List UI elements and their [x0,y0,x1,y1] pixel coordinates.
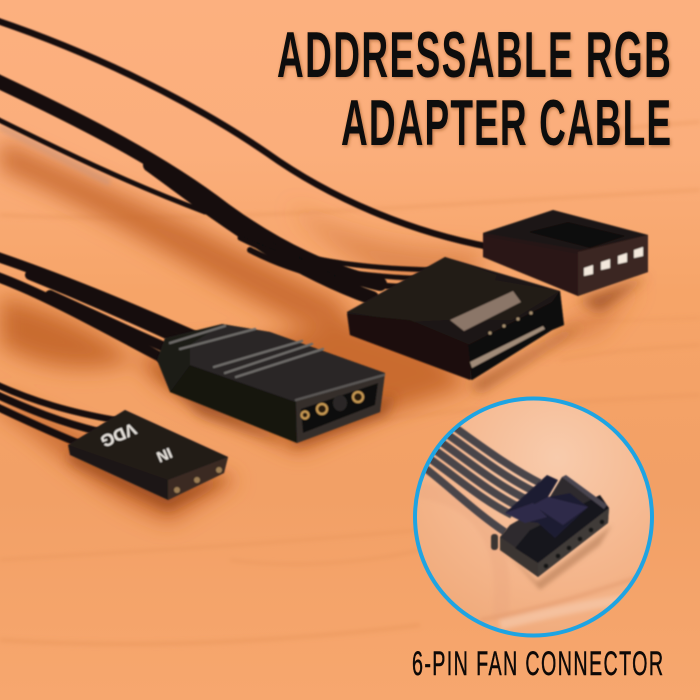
strain relief and ridges [170,326,384,400]
4-pin fan connector [483,210,648,296]
title [277,19,671,160]
pin holes [544,520,604,568]
latch [505,475,588,538]
pin sockets [174,467,222,493]
inset circle: 6-pin fan connector closeup [415,398,660,636]
connector pins [488,311,533,335]
wire bundle to RGB connector [0,256,200,365]
IN label: IN [154,444,174,465]
pin holes [584,247,643,276]
cast shadows on table [0,140,640,522]
gold contacts [302,392,363,418]
wire bundle to fan connectors [0,80,435,298]
contact shadows under connectors [70,276,648,510]
inset blue ring [415,398,652,636]
cables [0,20,490,446]
large fan connector [347,257,564,380]
pale reflection beside wire [0,127,110,183]
title line 2: ADAPTER CABLE [341,87,671,160]
title line 1: ADDRESSABLE RGB [277,19,671,92]
inset 6-pin connector [491,475,609,577]
3-pin VDG IN connector [68,410,228,500]
single wire to 4-pin connector [0,20,490,247]
caption: 6-PIN FAN CONNECTOR [412,644,663,682]
inset wood grain [484,577,633,630]
wire bundle to 3-pin connector [0,384,115,446]
inset shadow [514,526,610,590]
inset wires [420,424,540,532]
VDG label: VDG [98,419,139,451]
RGB 3-pin header connector [157,324,385,443]
